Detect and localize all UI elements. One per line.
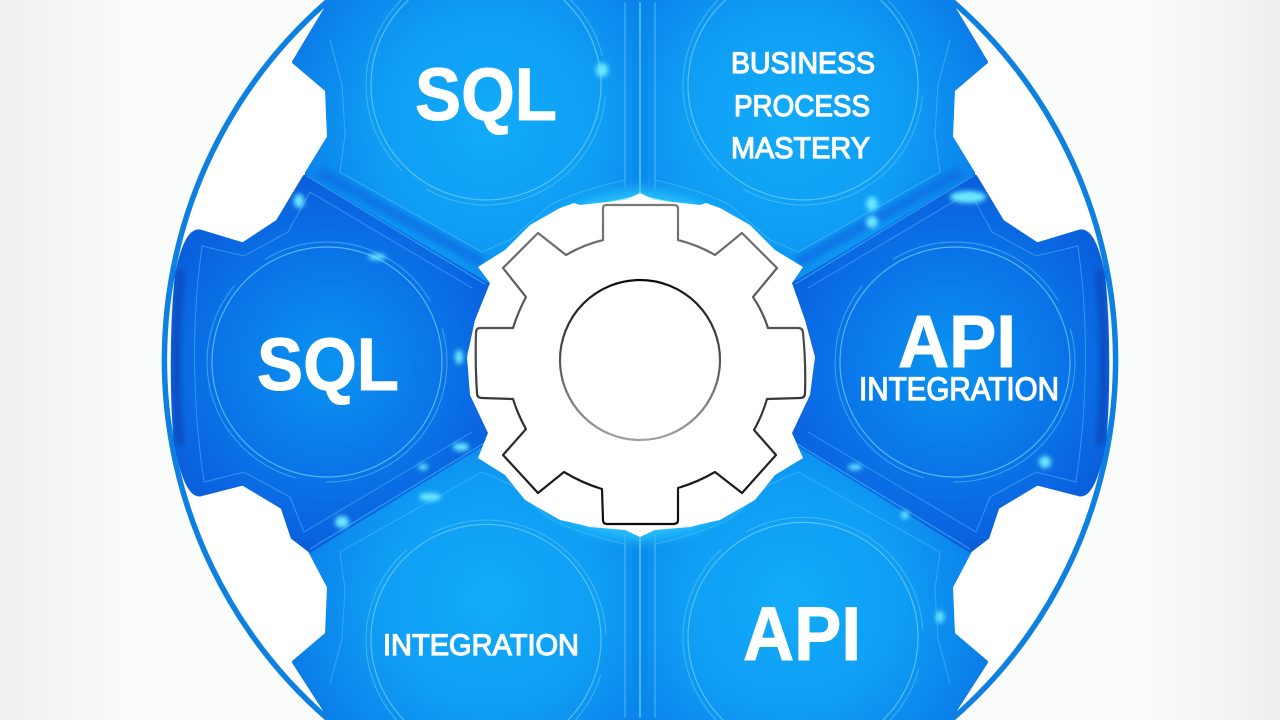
light sparkles: [294, 63, 1051, 623]
panel: SQL top left: [294, 0, 640, 295]
panel: Business Process Mastery top right: [640, 0, 986, 295]
panel: SQL left: [173, 176, 488, 550]
centre seams between top and bottom panels: [625, 2, 655, 718]
glow above and below the central hub: [540, 196, 740, 534]
label: API Integration: API: [898, 300, 1016, 383]
panel: Integration bottom left: [294, 429, 640, 720]
outer ring: [164, 0, 1116, 720]
central white hub cutout: [467, 193, 815, 537]
panel: API Integration right: [792, 176, 1107, 550]
label: SQL: SQL: [415, 53, 557, 136]
label: API Integration: [859, 300, 1059, 407]
label: API: API: [743, 592, 861, 677]
label: Business Process Mastery: [731, 47, 875, 165]
gear centre circle: [560, 280, 720, 440]
label: Integration: INTEGRATION: [383, 629, 579, 662]
icon: central gear: [476, 205, 805, 524]
label: Business Process Mastery: MASTERY: [731, 132, 870, 165]
label: SQL: SQL: [257, 323, 399, 406]
panel: API bottom right: [640, 429, 986, 720]
label: API Integration: INTEGRATION: [859, 371, 1059, 407]
label: Business Process Mastery: PROCESS: [734, 90, 870, 123]
label: Business Process Mastery: BUSINESS: [731, 47, 875, 80]
